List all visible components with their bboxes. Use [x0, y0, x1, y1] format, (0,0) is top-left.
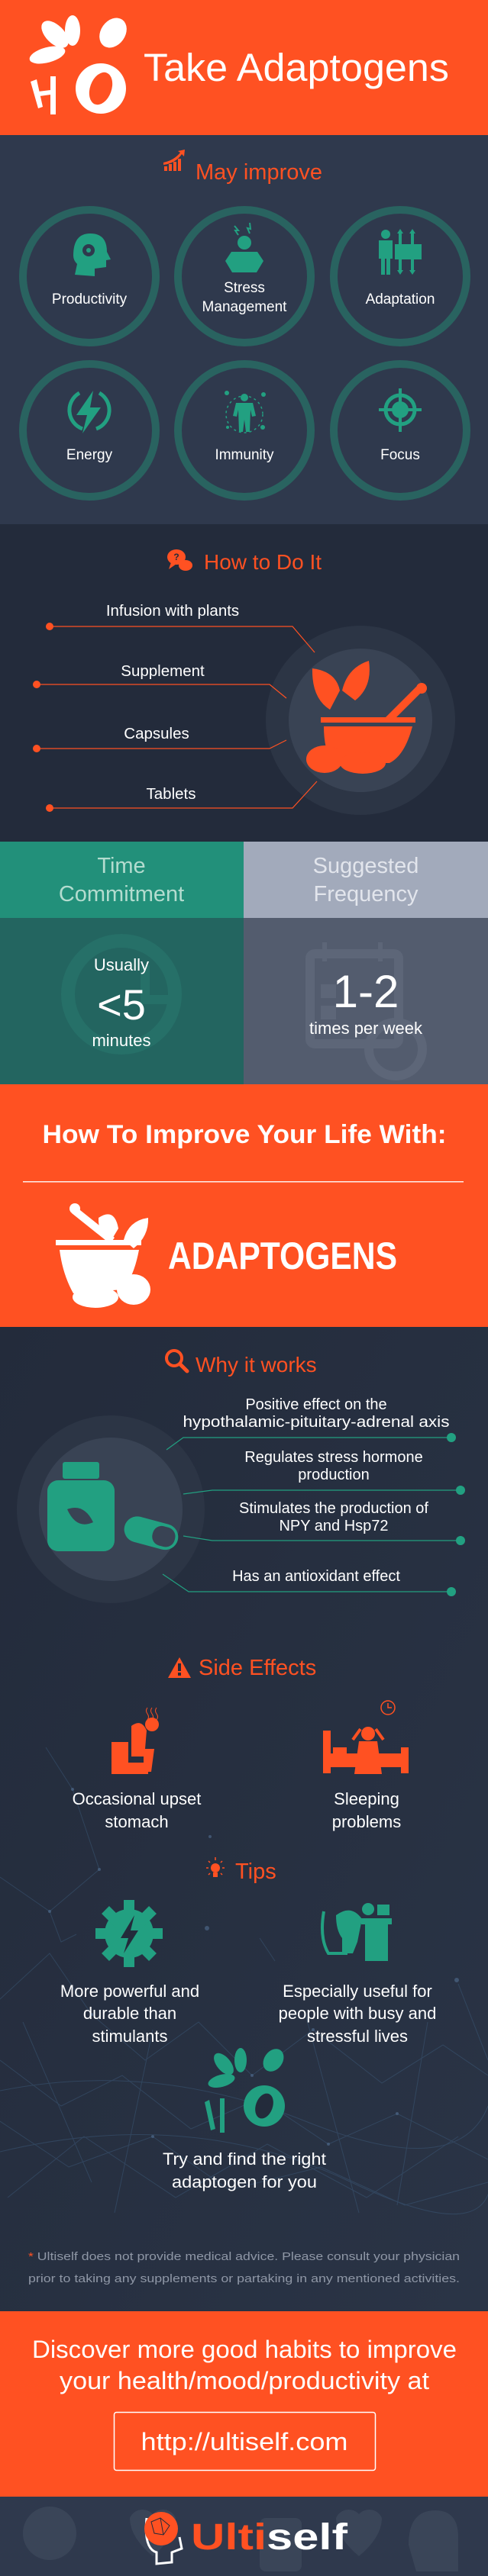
panel: how to do it methods [33, 602, 455, 815]
header: Take Adaptogens [27, 13, 449, 114]
illustration: mortar circle [266, 626, 455, 815]
benefit: Stress Management [178, 210, 311, 343]
benefit: Stress Management: Stress [224, 280, 265, 296]
benefit: Immunity: Immunity [215, 447, 274, 463]
footer: Ultiself logo [23, 2507, 458, 2571]
reason 1: hypothalamic-pituitary-adrenal axis [183, 1414, 449, 1431]
method: Capsules: Capsules [124, 725, 189, 742]
reason 2 [244, 1449, 423, 1483]
call to action: your health/mood/productivity at [60, 2367, 429, 2394]
icon: leaves [27, 13, 132, 114]
benefit: Productivity: Productivity [52, 291, 128, 308]
banner: ADAPTOGENS [56, 1203, 397, 1308]
heading: Side Effects: Side Effects [199, 1656, 316, 1680]
method: Tablets: Tablets [147, 785, 196, 803]
tip: busy lives: stressful lives [307, 2027, 408, 2046]
benefit: Adaptation: Adaptation [366, 291, 435, 308]
tip: more powerful: durable than [83, 2004, 176, 2023]
tip: busy lives: people with busy and [279, 2004, 436, 2023]
backgrounds [0, 0, 488, 135]
tip: find the right adaptogen [163, 2045, 326, 2191]
banner: ADAPTOGENS: ADAPTOGENS [168, 1235, 397, 1277]
tip: busy lives [279, 1903, 436, 2046]
panel: suggested frequency: 1-2 [333, 966, 399, 1017]
panel: time commitment: minutes [92, 1031, 151, 1050]
panel: suggested frequency: times per week [309, 1019, 423, 1038]
disclaimer [28, 2250, 460, 2285]
method: Supplement: Supplement [121, 662, 205, 680]
reason 1: Positive effect on the [245, 1396, 387, 1413]
reason 4: Has an antioxidant effect [232, 1568, 400, 1585]
side effect: upset stomach [73, 1708, 201, 1831]
heading: How To Improve Your Life With: How To Improve Your Life With: [43, 1120, 446, 1149]
heading: Why it works: Why it works [196, 1353, 317, 1377]
benefit: Energy [23, 364, 156, 497]
panel: time commitment [0, 842, 244, 1084]
panel: time commitment: Commitment [59, 882, 184, 906]
benefit: Focus: Focus [380, 447, 420, 463]
benefit: Energy: Energy [66, 447, 113, 463]
panel: suggested frequency: Frequency [313, 882, 419, 906]
heading: Tips [206, 1857, 276, 1884]
tip: busy lives: Especially useful for [283, 1982, 432, 2001]
side effect: sleeping problems [323, 1701, 409, 1831]
reason 3: NPY and Hsp72 [279, 1518, 389, 1534]
call to action: Discover more good habits to improve [32, 2336, 457, 2363]
tip: find the right adaptogen: Try and find the right [163, 2149, 326, 2169]
tip: find the right adaptogen: adaptogen for you [172, 2172, 317, 2191]
benefit: Stress Management: Management [202, 299, 287, 315]
method: Infusion with plants: Infusion with plants [106, 602, 239, 620]
benefit: Adaptation [334, 210, 467, 343]
benefit: Focus [334, 364, 467, 497]
side effect: sleeping problems: Sleeping [334, 1789, 399, 1808]
tip: more powerful: stimulants [92, 2027, 168, 2046]
panel: time commitment: <5 [97, 980, 146, 1029]
disclaimer: * Ultiself does not provide medical advice. Please consult your physician [28, 2250, 460, 2263]
reason 2: production [298, 1467, 370, 1483]
panel: time commitment: Time [97, 854, 146, 878]
call to action [32, 2336, 457, 2471]
reason 1 [183, 1396, 449, 1431]
heading: May improve [163, 150, 322, 185]
button: url: http://ultiself.com [141, 2428, 348, 2455]
heading: How to Do It: How to Do It [204, 550, 322, 574]
heading: Tips: Tips [235, 1860, 276, 1884]
panel: time commitment: Usually [94, 955, 149, 974]
illustration: bottle and pill [17, 1415, 205, 1603]
reason 2: Regulates stress hormone [244, 1449, 423, 1466]
title: Take Adaptogens [144, 46, 449, 89]
logo mark [144, 2512, 182, 2564]
panel: benefits circles [23, 210, 467, 497]
footer: Ultiself logo: Ulti self [191, 2517, 348, 2558]
heading: How to Do It: ? [173, 552, 179, 562]
benefit: Immunity [178, 364, 311, 497]
benefit: Productivity [23, 210, 156, 343]
heading: May improve: May improve [196, 160, 322, 185]
disclaimer: prior to taking any supplements or partaking in any mentioned activities. [28, 2272, 460, 2285]
panel: why it works [17, 1396, 465, 1603]
panel: suggested frequency: Suggested [313, 854, 419, 878]
button: url [115, 2413, 376, 2471]
tip: more powerful: More powerful and [60, 1982, 199, 2001]
icon: white mortar [56, 1203, 150, 1308]
panel: suggested frequency [244, 842, 488, 1084]
reason 3: Stimulates the production of [239, 1500, 428, 1517]
side effect: upset stomach: Occasional upset [73, 1789, 201, 1808]
side effect: sleeping problems: problems [332, 1812, 401, 1831]
tip: more powerful [60, 1900, 199, 2046]
side effect: upset stomach: stomach [105, 1812, 169, 1831]
reason 3 [239, 1500, 428, 1534]
